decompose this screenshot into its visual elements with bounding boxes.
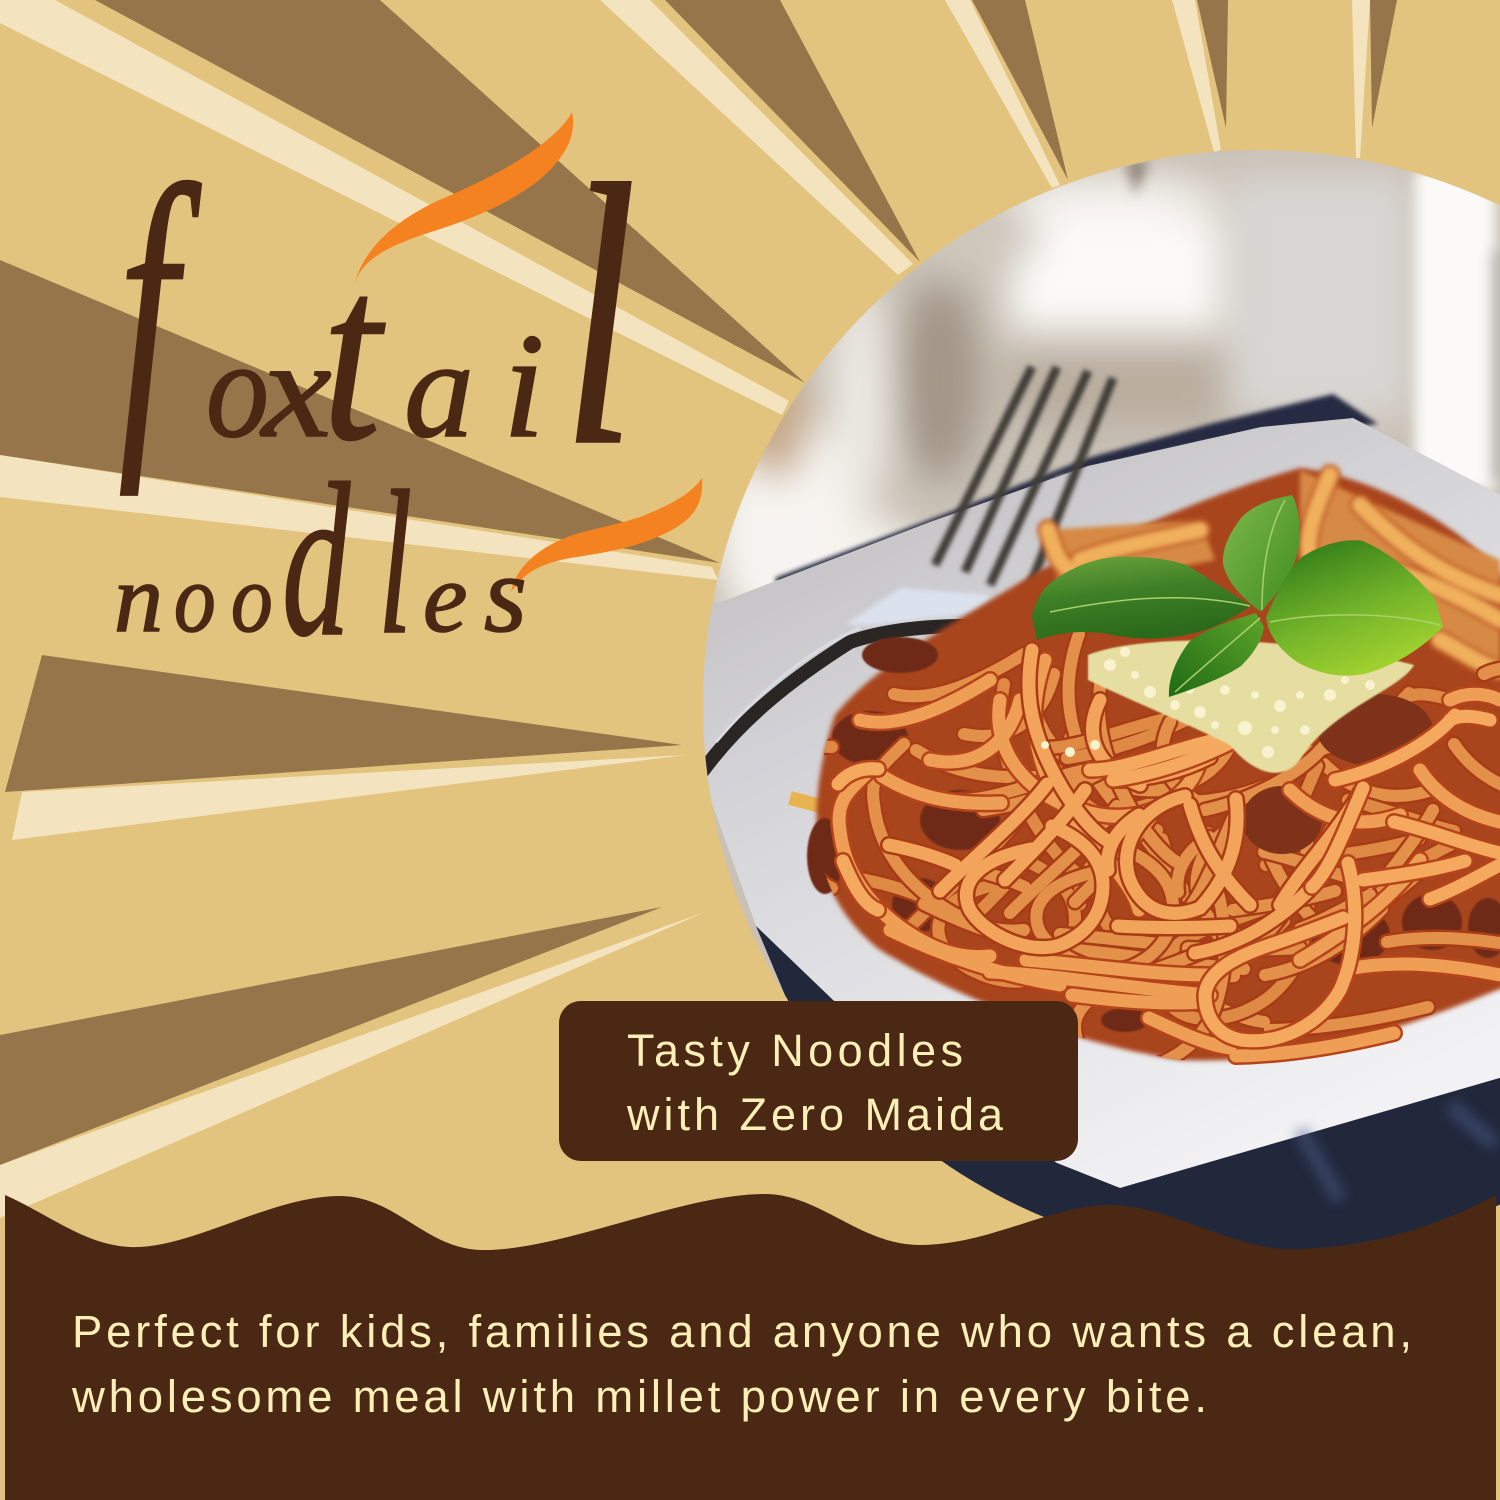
title: foxtail: o: [206, 311, 269, 466]
background sunburst rays: [0, 0, 1397, 1218]
subtitle: noodles: [114, 438, 527, 682]
photo: plate of spaghetti with basil in a circle: [690, 140, 1500, 1270]
badge text: Tasty Noodles: [627, 1025, 963, 1076]
orange swoosh above title: [354, 112, 573, 286]
subtitle: noodles: l: [378, 449, 412, 677]
grated cheese: [1041, 641, 1414, 773]
title: foxtail: x: [260, 313, 332, 467]
subtitle: noodles: n: [114, 545, 163, 653]
subtitle: noodles: o: [231, 544, 273, 653]
subtitle: noodles: d: [282, 438, 351, 682]
title: foxtail: [118, 108, 637, 523]
title: foxtail: f: [118, 117, 204, 497]
badge text: with Zero Maida: [626, 1089, 1004, 1140]
title: foxtail: l: [562, 108, 637, 523]
subtitle: noodles: s: [484, 533, 527, 655]
orange swoosh above noodles: [511, 478, 702, 592]
loose noodle on plate: [790, 798, 828, 808]
subtitle: noodles: o: [174, 544, 216, 653]
dark cloth under the plate: [756, 926, 1500, 1270]
fork: [702, 367, 1113, 772]
badge: tasty noodles: [559, 1001, 1078, 1161]
title: foxtail: a: [404, 312, 474, 467]
bottom description text: wholesome meal with millet power in every bite.: [71, 1371, 1207, 1422]
bottom wavy band: [5, 1194, 1496, 1500]
noodle mound: [806, 460, 1500, 1065]
blurred back noodles: [1045, 470, 1500, 670]
subtitle: noodles: e: [423, 542, 467, 653]
title: foxtail: i: [503, 303, 545, 469]
bottom description text: Perfect for kids, families and anyone who wants a clean,: [72, 1306, 1412, 1357]
white plate: [700, 418, 1500, 1188]
basil leaves: [1032, 495, 1443, 697]
title: foxtail: t: [322, 216, 386, 493]
dark cloth behind the plate: [775, 394, 1378, 592]
meat sauce chunks: [807, 637, 1500, 1032]
under-layer noodles: [824, 632, 1500, 1060]
